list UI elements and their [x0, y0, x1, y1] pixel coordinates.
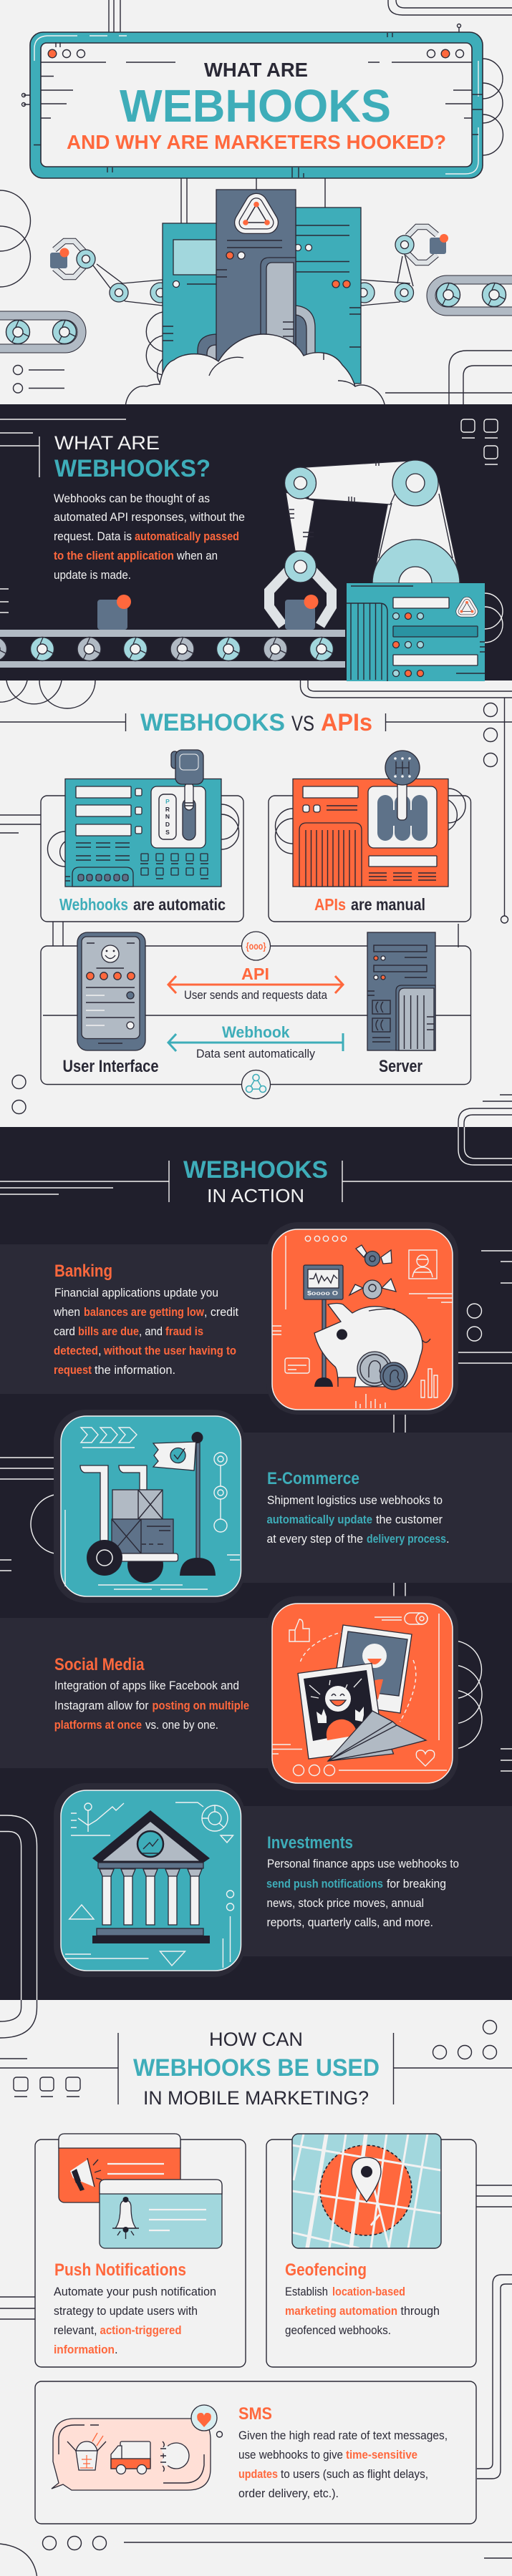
heading: webhooks vs apis: APIs — [321, 709, 372, 736]
banking card: piggy bank — [272, 1229, 453, 1410]
sms chat bubble illustration — [52, 2405, 222, 2490]
geofencing text: Establish — [285, 2285, 328, 2298]
banking text: , and — [139, 1325, 163, 1338]
social media text — [54, 1655, 249, 1732]
intro paragraph: when an — [176, 550, 218, 562]
dark band: webhooks in action — [0, 1127, 512, 2000]
panel: e-commerce — [54, 1410, 512, 1603]
sms text — [238, 2404, 448, 2500]
social media text: Instagram allow for — [54, 1699, 149, 1712]
icon: heart — [416, 1750, 435, 1766]
geofencing text: through — [401, 2305, 440, 2318]
panel: geofencing — [266, 2134, 476, 2367]
icon: toggle — [405, 1613, 428, 1624]
heading: how can webhooks be used — [0, 2029, 512, 2109]
package in gripper — [285, 595, 318, 630]
intro paragraph: to the client application — [54, 550, 174, 562]
push notifications text: strategy to update users with — [54, 2305, 198, 2318]
investments card: bank — [61, 1790, 241, 1971]
heading: webhooks vs apis: WEBHOOKS — [140, 709, 285, 736]
caption: apis are manual: APIs — [314, 895, 346, 914]
push notifications text: Push Notifications — [54, 2260, 186, 2280]
geofencing text — [285, 2260, 440, 2337]
right conveyor — [431, 280, 512, 311]
icon: api braces badge: {ooo} — [246, 940, 266, 952]
e-commerce text: delivery process — [367, 1533, 446, 1546]
geofencing text: marketing automation — [285, 2305, 397, 2318]
banking text: Banking — [54, 1262, 112, 1281]
robot arm — [269, 460, 460, 625]
social media text: Social Media — [54, 1655, 145, 1674]
panel: banking — [0, 1222, 458, 1415]
intro paragraph: update is made. — [54, 569, 131, 582]
banking text: Financial applications update you — [54, 1287, 218, 1299]
small list marks — [13, 365, 64, 393]
gripper joint — [285, 551, 317, 582]
heading: how can webhooks be used: WEBHOOKS BE USED — [133, 2054, 380, 2082]
icon: webhook badge — [242, 1070, 271, 1099]
heading: how can webhooks be used: HOW CAN — [209, 2029, 303, 2050]
api arrow: API — [241, 965, 269, 983]
panel: api and webhook flow diagram — [41, 932, 471, 1099]
banking text: balances are getting low — [84, 1306, 204, 1319]
manual machine — [293, 751, 448, 887]
label: server: Server — [379, 1057, 422, 1076]
investments text: Investments — [267, 1833, 353, 1853]
panel: social media — [0, 1596, 458, 1790]
social media text: Integration of apps like Facebook and — [54, 1679, 239, 1692]
heading: how can webhooks be used: IN MOBILE MARKETING? — [143, 2087, 369, 2109]
e-commerce text: E-Commerce — [267, 1469, 359, 1488]
left conveyor — [0, 316, 82, 348]
sms text: Given the high read rate of text messages, — [238, 2429, 448, 2442]
heading: webhooks in action: WEBHOOKS — [183, 1156, 328, 1184]
banking text: detected — [54, 1345, 98, 1357]
geofencing text: location-based — [332, 2285, 405, 2298]
push notifications text: relevant, — [54, 2324, 97, 2337]
heading: webhooks in action — [183, 1156, 328, 1206]
cloud — [125, 334, 385, 408]
e-commerce text: the customer — [376, 1513, 443, 1526]
geofence map — [292, 2134, 441, 2248]
heading: webhooks in action: IN ACTION — [207, 1185, 304, 1206]
intro paragraph — [54, 492, 245, 582]
investments text — [266, 1833, 459, 1929]
intro paragraph: automatically passed — [135, 530, 239, 543]
intro paragraph: request. Data is — [54, 530, 132, 543]
automatic machine: R — [165, 806, 170, 813]
banking text: card — [54, 1325, 75, 1338]
panel: webhooks are automatic — [41, 750, 243, 922]
icon: exhaust cloud — [160, 2441, 189, 2472]
control machine — [347, 583, 503, 681]
push notifications text: . — [115, 2343, 118, 2356]
sms text: time-sensitive — [346, 2449, 417, 2462]
panel: apis are manual — [269, 751, 471, 922]
intro paragraph: automated API responses, without the — [54, 511, 245, 524]
icon: delivery truck — [111, 2441, 150, 2474]
investments text: for breaking — [387, 1878, 446, 1890]
sms text: to users (such as flight delays, — [281, 2468, 428, 2481]
webhook arrow — [168, 1023, 343, 1060]
title: what are: WHAT ARE — [204, 59, 308, 81]
title board — [30, 32, 483, 178]
social media text: posting on multiple — [152, 1699, 249, 1712]
webhook arrow: Data sent automatically — [196, 1047, 315, 1060]
sms text: SMS — [238, 2404, 272, 2424]
icon: thumbs up — [289, 1619, 309, 1641]
e-commerce card: delivery cart — [61, 1416, 241, 1596]
push notifications text: Automate your push notification — [54, 2285, 216, 2298]
banking text: without the user having to — [103, 1345, 236, 1357]
icon: takeout box — [67, 2433, 106, 2470]
banking text: request — [54, 1364, 92, 1377]
sms text: updates — [238, 2468, 278, 2481]
webhook arrow: Webhook — [222, 1023, 290, 1041]
e-commerce text: at every step of the — [266, 1533, 363, 1546]
icon: bars — [421, 1369, 438, 1397]
heading: webhooks vs apis: VS — [291, 712, 314, 736]
heading: what are webhooks — [54, 432, 211, 482]
e-commerce text: automatically update — [266, 1513, 372, 1526]
banking text: when — [53, 1306, 80, 1319]
heading: what are webhooks: WEBHOOKS? — [54, 455, 211, 482]
investments text: Personal finance apps use webhooks to — [267, 1858, 459, 1870]
icon: paper plane — [328, 1711, 426, 1761]
icon: api braces badge — [242, 932, 271, 960]
banking text: fraud is — [165, 1325, 203, 1338]
social media text: platforms at once — [54, 1719, 142, 1732]
icon: monitor on stand: $oooo O — [307, 1290, 338, 1297]
conveyor belt — [0, 630, 345, 668]
intro paragraph: Webhooks can be thought of as — [54, 492, 210, 505]
panel: investments — [54, 1783, 512, 1977]
label: user interface: User Interface — [63, 1057, 159, 1076]
banking text — [53, 1262, 238, 1377]
centre server tower with webhook logo — [216, 190, 296, 369]
dark band: what are webhooks — [0, 404, 512, 681]
back photo — [332, 1625, 412, 1713]
sms text: order delivery, etc.). — [238, 2487, 339, 2500]
banking text: , — [98, 1345, 102, 1357]
icon: wanted poster — [409, 1250, 437, 1279]
push notifications text — [54, 2260, 216, 2356]
automatic machine: D — [165, 821, 170, 828]
subtitle: AND WHY ARE MARKETERS HOOKED? — [67, 131, 446, 153]
automatic machine — [65, 750, 221, 887]
push notifications text: information — [54, 2343, 115, 2356]
api arrow: User sends and requests data — [184, 988, 327, 1002]
panel: sms — [35, 2381, 476, 2524]
package on belt — [97, 595, 131, 630]
icon: bank building — [92, 1810, 210, 1943]
server — [367, 932, 435, 1050]
sms text: use webhooks to give — [238, 2449, 343, 2462]
icon: flying coins — [349, 1245, 396, 1299]
decorative lines for mobile marketing section — [0, 2000, 512, 2576]
geofencing text: geofenced webhooks. — [285, 2324, 391, 2337]
e-commerce text — [266, 1469, 450, 1546]
investments text: reports, quarterly calls, and more. — [266, 1916, 433, 1929]
automatic machine: N — [165, 813, 170, 820]
heading: webhooks vs apis — [0, 709, 512, 736]
icon: cart — [80, 1465, 178, 1583]
decorative lines under band — [0, 680, 512, 1127]
panel: push notifications — [35, 2134, 246, 2367]
icon: flag — [153, 1432, 216, 1576]
push notification illustration — [59, 2134, 222, 2248]
icon: piggy bank — [314, 1304, 430, 1390]
right robot arm — [354, 227, 448, 306]
left robot arm — [50, 241, 170, 306]
caption: apis are manual: are manual — [351, 895, 425, 914]
investments text: send push notifications — [266, 1878, 383, 1890]
front photo — [298, 1663, 384, 1759]
caption: apis are manual — [314, 895, 425, 914]
user interface phone — [77, 932, 145, 1050]
banking text: bills are due — [78, 1325, 139, 1338]
automatic machine: P — [165, 798, 170, 805]
small window icons — [461, 419, 498, 464]
title: webhooks: WEBHOOKS — [120, 80, 391, 132]
banking text: , credit — [204, 1306, 238, 1319]
icon: card — [285, 1358, 309, 1373]
left server tower — [163, 223, 217, 385]
loops beside machine — [146, 312, 163, 386]
push notifications text: action-triggered — [100, 2324, 182, 2337]
right server tower — [295, 208, 361, 384]
hero machine illustration — [0, 0, 512, 408]
investments text: news, stock price moves, annual — [266, 1897, 424, 1910]
e-commerce text: . — [446, 1533, 450, 1546]
icon: monitor on stand — [304, 1265, 343, 1387]
e-commerce text: Shipment logistics use webhooks to — [267, 1494, 443, 1507]
social media text: vs. one by one. — [145, 1719, 218, 1732]
caption: webhooks are automatic: Webhooks — [59, 895, 128, 914]
caption: webhooks are automatic: are automatic — [133, 895, 226, 914]
automatic machine: S — [165, 829, 170, 836]
banking text: the information. — [95, 1364, 175, 1377]
heading: what are webhooks: WHAT ARE — [54, 432, 160, 454]
caption: webhooks are automatic — [59, 895, 226, 914]
social card: photos and paper plane — [272, 1604, 453, 1783]
icon: pie chart — [202, 1805, 228, 1831]
geofencing text: Geofencing — [285, 2260, 367, 2280]
api arrow — [168, 965, 343, 1002]
